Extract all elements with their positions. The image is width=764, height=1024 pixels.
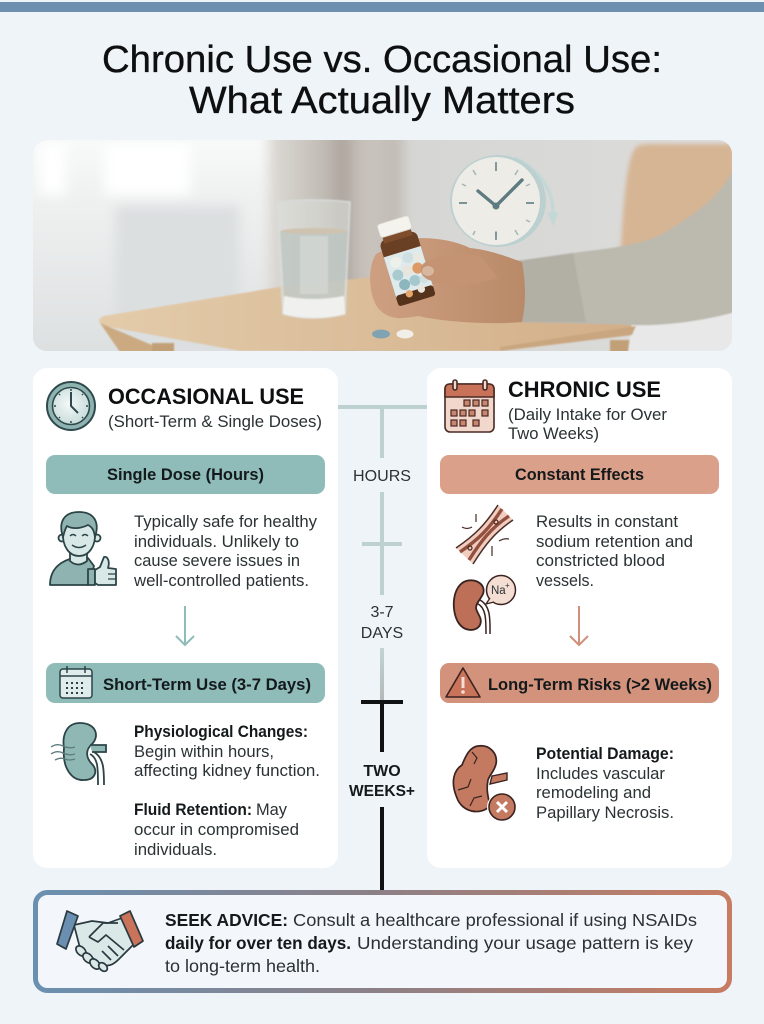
text: advice: to long-term health. (165, 956, 320, 976)
icon: handshake (57, 911, 143, 973)
text: potential damage: Includes vascular (536, 765, 666, 783)
heading: chronic use: Two Weeks) (508, 425, 599, 443)
photo: table (99, 275, 735, 353)
icon: damaged kidney with x badge (453, 746, 517, 822)
text: physiological changes and fluid retention: May (256, 801, 288, 819)
text: single dose description: individuals. Unlikely to (134, 533, 299, 551)
text: advice (165, 910, 697, 976)
arrow: down (570, 606, 588, 645)
icon: smiling person thumbs up (50, 512, 116, 585)
top accent bar (0, 2, 764, 12)
text: physiological changes and fluid retention: individuals. (134, 841, 217, 859)
icon: clock (47, 382, 95, 430)
timeline label: two weeks plus: TWO (363, 763, 401, 780)
banner: constant effects: Constant Effects (515, 466, 644, 484)
photo: hand and pill bottle (370, 214, 525, 323)
text: physiological changes and fluid retention: Begin within hours, (134, 743, 274, 761)
text: constant effects description: constricted blood (536, 552, 665, 570)
heading: occasional use: (Short-Term & Single Doses) (108, 413, 322, 431)
heading: chronic use: CHRONIC USE (508, 377, 661, 402)
text: single dose description (133, 513, 318, 590)
text: physiological changes and fluid retention: affecting kidney function. (134, 762, 320, 780)
heading: occasional use (108, 384, 322, 431)
banner: single dose: Single Dose (Hours) (107, 466, 264, 484)
banner: long-term risks: Long-Term Risks (>2 Weeks) (488, 675, 712, 694)
text: constant effects description (536, 513, 693, 590)
timeline label: hours: HOURS (353, 468, 411, 485)
timeline label: 3-7 days: DAYS (361, 625, 403, 642)
callout: seek advice (36, 892, 730, 990)
icon: kidney with sodium bubble: + (505, 581, 510, 590)
icon: calendar (60, 666, 92, 698)
banner: single dose (46, 455, 325, 494)
text: advice: Understanding your usage pattern is key (357, 933, 693, 953)
arrow: down (176, 606, 194, 645)
heading: chronic use (508, 377, 668, 443)
title (102, 39, 662, 122)
icon: warning triangle (446, 668, 480, 697)
text: potential damage: remodeling and (536, 784, 651, 802)
title: Chronic Use vs. Occasional Use: (102, 39, 662, 81)
text: physiological changes and fluid retention: occur in compromised (134, 821, 299, 839)
timeline label: two weeks plus: WEEKS+ (349, 783, 415, 800)
timeline label: two weeks plus (349, 763, 415, 800)
photo: water glass (277, 200, 350, 318)
icon: monthly calendar (445, 380, 494, 432)
timeline label: 3-7 days: 3-7 (370, 604, 394, 621)
banner: long-term risks (440, 663, 719, 703)
text: single dose description: well-controlled patients. (133, 572, 309, 590)
icon: kidney with sodium bubble: Na (491, 585, 506, 597)
panel: chronic use (427, 368, 732, 868)
text: potential damage: Papillary Necrosis. (536, 804, 674, 822)
text: constant effects description: Results in constant (536, 513, 678, 531)
text: advice: Consult a healthcare professional if using NSAIDs (293, 910, 697, 930)
title: What Actually Matters (189, 80, 575, 122)
photo: hand holding pill bottle beside water glass with clock (33, 140, 732, 351)
text: physiological changes and fluid retention: Physiological Changes: (134, 723, 308, 741)
text: constant effects description: vessels. (536, 572, 594, 590)
timeline connector (338, 407, 427, 891)
icon: kidney with fluid waves (51, 723, 106, 785)
banner: short-term use (46, 663, 325, 703)
banner: constant effects (440, 455, 719, 494)
text: potential damage (536, 745, 674, 822)
timeline label: 3-7 days (361, 604, 403, 642)
icon: kidney with sodium bubble (454, 576, 516, 634)
text: advice: daily for over ten days. (165, 933, 351, 953)
photo: sleeve (510, 165, 735, 325)
icon: constricted blood vessel (456, 505, 513, 564)
text: single dose description: cause severe issues in (134, 552, 300, 570)
text: physiological changes and fluid retention: Fluid Retention: (134, 801, 252, 819)
photo: two pills (372, 330, 414, 338)
text: potential damage: Potential Damage: (536, 745, 674, 763)
heading: chronic use: (Daily Intake for Over (508, 406, 668, 424)
photo: chair back (618, 142, 732, 247)
banner: short-term use: Short-Term Use (3-7 Days) (103, 675, 311, 694)
panel: occasional use (33, 368, 338, 868)
photo: wall clock (450, 155, 559, 247)
heading: occasional use: OCCASIONAL USE (108, 384, 304, 409)
text: physiological changes and fluid retention (134, 723, 320, 859)
text: constant effects description: sodium retention and (536, 533, 693, 551)
text: advice: SEEK ADVICE: (165, 910, 288, 930)
text: single dose description: Typically safe for healthy (134, 513, 318, 531)
